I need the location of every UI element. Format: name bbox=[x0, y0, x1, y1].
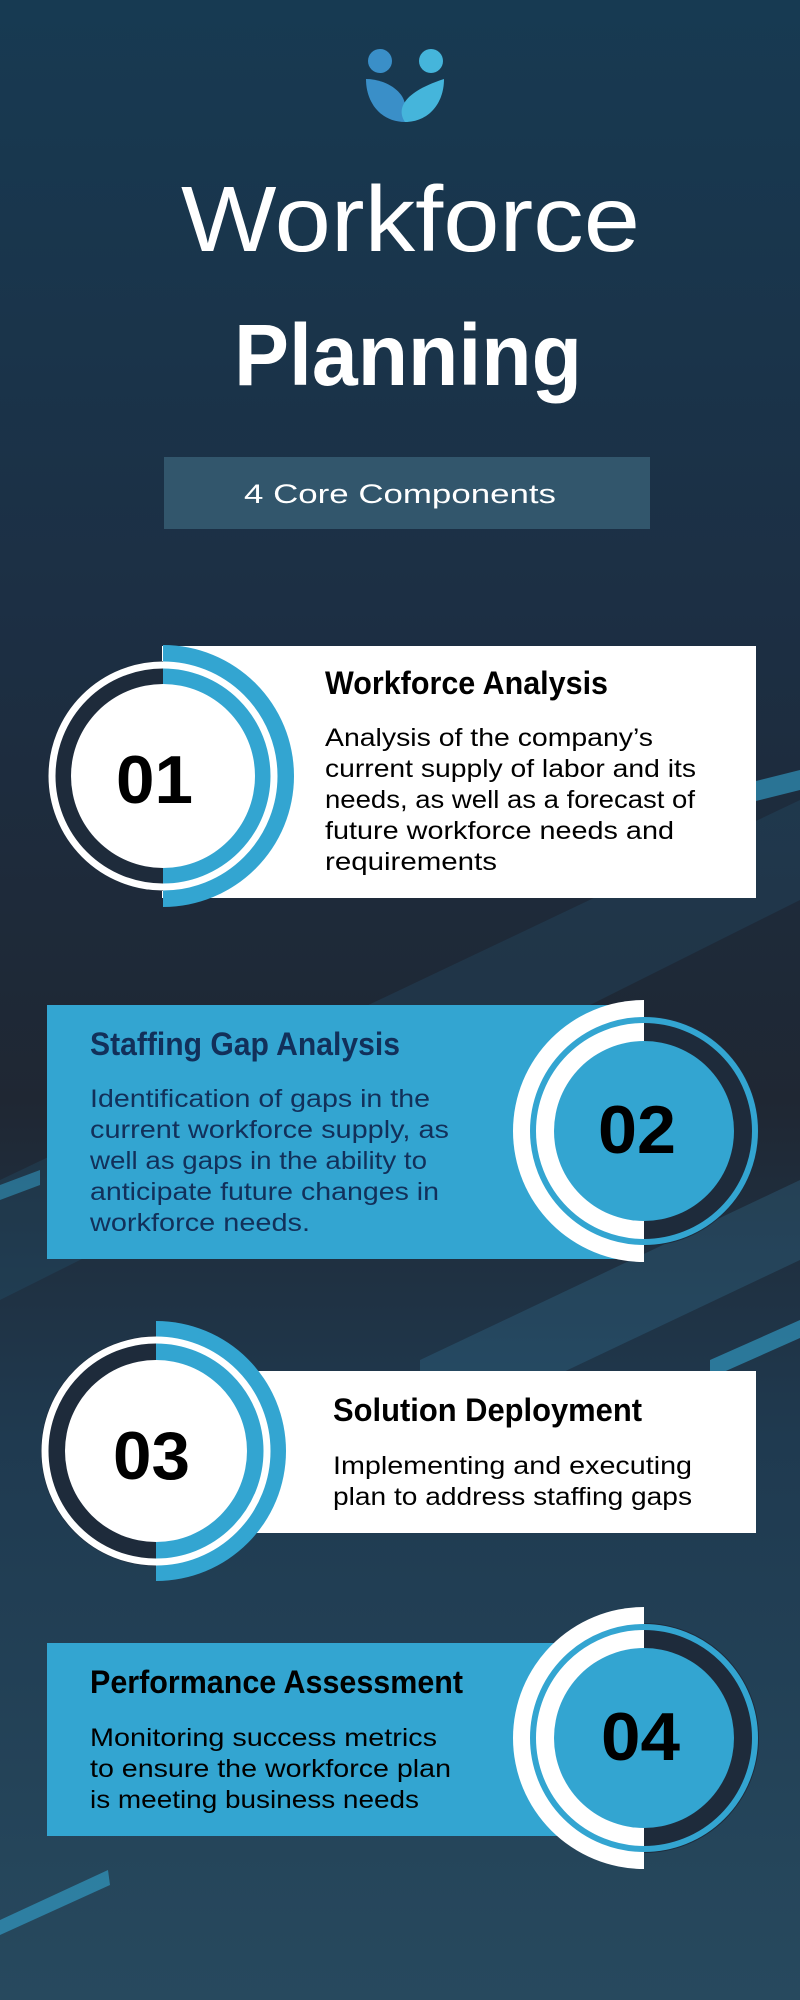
subtitle box: 4 Core Components bbox=[244, 479, 556, 509]
panel: 04 performance assessment: is meeting business needs bbox=[90, 1786, 419, 1814]
panel: 03 solution deployment: Implementing and executing bbox=[333, 1452, 692, 1480]
panel: 02 staffing gap analysis: anticipate future changes in bbox=[90, 1178, 439, 1206]
panel: 02 staffing gap analysis: current workforce supply, as bbox=[90, 1116, 449, 1144]
panel: 02 staffing gap analysis: Staffing Gap Analysis bbox=[90, 1026, 400, 1062]
panel: 01 workforce analysis: current supply of labor and its bbox=[325, 755, 696, 783]
panel: 02 staffing gap analysis: workforce needs. bbox=[89, 1209, 310, 1237]
panel: 03 solution deployment: Solution Deployment bbox=[333, 1392, 642, 1428]
icon: number circle 02: 02 bbox=[598, 1092, 676, 1168]
icon: number circle 03 bbox=[41, 1321, 286, 1581]
panel: 03 solution deployment: plan to address staffing gaps bbox=[333, 1483, 692, 1511]
panel: 02 staffing gap analysis: well as gaps in the ability to bbox=[89, 1147, 427, 1175]
icon: logo bbox=[366, 49, 444, 122]
panel: 04 performance assessment: to ensure the workforce plan bbox=[90, 1755, 451, 1783]
icon: number circle 04: 04 bbox=[601, 1699, 680, 1775]
panel: 01 workforce analysis: requirements bbox=[325, 848, 497, 876]
icon: number circle 01: 01 bbox=[116, 742, 193, 818]
title: Planning bbox=[234, 307, 582, 404]
panel: 01 workforce analysis bbox=[48, 645, 756, 907]
subtitle box bbox=[164, 457, 650, 529]
panel: 03 solution deployment bbox=[41, 1321, 756, 1581]
panel: 02 staffing gap analysis bbox=[47, 1000, 759, 1262]
panel: 01 workforce analysis: Workforce Analysis bbox=[325, 665, 608, 701]
icon: number circle 04 bbox=[513, 1607, 759, 1869]
panel: 04 performance assessment: Monitoring success metrics bbox=[90, 1724, 437, 1752]
panel: 01 workforce analysis: future workforce needs and bbox=[325, 817, 674, 845]
panel: 04 performance assessment bbox=[47, 1607, 759, 1869]
title bbox=[181, 167, 640, 404]
icon: number circle 02 bbox=[513, 1000, 759, 1262]
panel: 04 performance assessment: Performance Assessment bbox=[90, 1664, 463, 1700]
panel: 01 workforce analysis: needs, as well as a forecast of bbox=[325, 786, 695, 814]
panel: 01 workforce analysis: Analysis of the company’s bbox=[325, 724, 653, 752]
icon: number circle 01 bbox=[48, 645, 294, 907]
panel: 02 staffing gap analysis: Identification of gaps in the bbox=[90, 1085, 430, 1113]
title: Workforce bbox=[181, 167, 640, 271]
icon: number circle 03: 03 bbox=[113, 1418, 190, 1494]
